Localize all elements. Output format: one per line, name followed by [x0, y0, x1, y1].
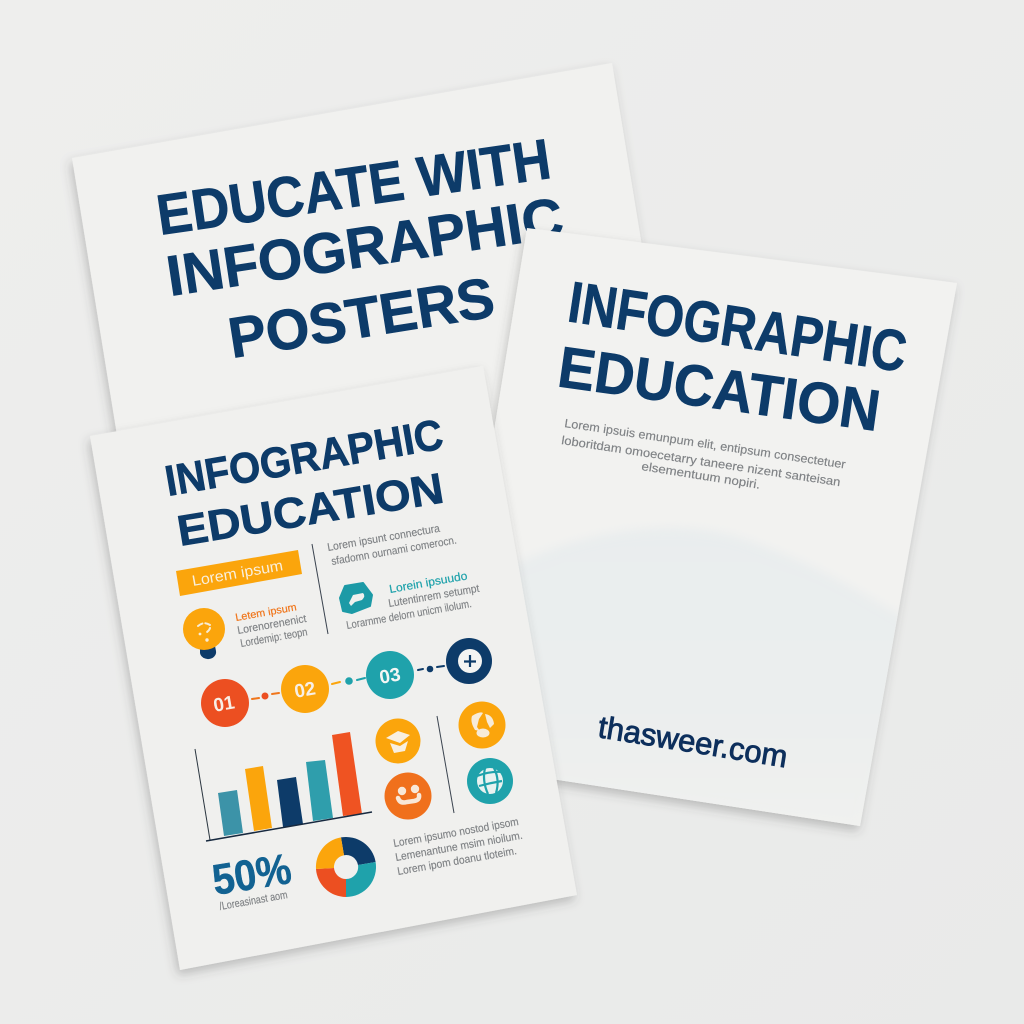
- website url: thasweer.com: [596, 709, 790, 774]
- right card title: [554, 270, 911, 444]
- intro text: sfadomn ournami comerocn.: [330, 535, 458, 568]
- footer text: [392, 816, 524, 878]
- icon: teal chat badge: [340, 583, 372, 613]
- big stat: /Loreasinast aom: [218, 889, 288, 913]
- teal callout: Lorarnme delorn unicm ilolum.: [345, 598, 473, 632]
- right card body text: loboritdam omoecetarry taneere nizent santeisan: [561, 433, 841, 489]
- label banner: Lorem ipsum: [191, 557, 284, 590]
- teal callout: Lutentinrem setumpt: [387, 583, 480, 610]
- right card title: INFOGRAPHIC: [564, 270, 911, 385]
- back card title: POSTERS: [224, 266, 499, 371]
- right card body text: Lorem ipsuis emunpum elit, entipsum consectetuer: [564, 416, 847, 471]
- footer text: Lorem ipsumo nostod ipsom: [392, 816, 520, 850]
- right card body text: [561, 416, 847, 492]
- donut chart: [316, 837, 376, 897]
- icon: graduation cap: [376, 718, 420, 764]
- footer text: Lorem ipom doanu tloteim.: [396, 845, 518, 878]
- right card body text: elsementuum nopiri.: [641, 459, 761, 492]
- teal callout: [345, 570, 480, 632]
- right card lower shade: [521, 535, 840, 593]
- orange callout: [234, 601, 308, 650]
- poster: right card: [440, 228, 957, 830]
- orange callout: Letem ipsum: [234, 601, 298, 624]
- bar chart: [195, 732, 372, 841]
- right card title: EDUCATION: [554, 335, 884, 444]
- step 02: [281, 665, 329, 713]
- icon: world map: [458, 702, 506, 748]
- teal callout: Lorein ipsuudo: [388, 570, 468, 596]
- orange callout: Lordemip: teopn: [239, 626, 308, 650]
- step 03: 03: [378, 664, 402, 689]
- icon: globe: [467, 758, 513, 804]
- front card title: INFOGRAPHIC: [162, 411, 447, 506]
- front card title: EDUCATION: [174, 465, 447, 556]
- intro text: Lorem ipsunt connectura: [326, 523, 442, 554]
- step 03: [366, 651, 414, 699]
- back card title: [153, 127, 567, 371]
- poster: back card: [72, 63, 700, 700]
- step timeline: [201, 638, 492, 727]
- back card title: EDUCATE WITH: [153, 127, 555, 248]
- back card title: INFOGRAPHIC: [162, 186, 567, 309]
- poster: front card: [90, 366, 577, 970]
- footer text: Lemenantune msim nioilum.: [394, 830, 524, 864]
- step plus: [446, 638, 492, 684]
- big stat: 50%: [209, 845, 295, 905]
- step 01: 01: [212, 692, 237, 717]
- orange callout: Lorenorenenict: [236, 613, 307, 637]
- step 01: [201, 679, 249, 727]
- icon: lightbulb: [183, 608, 225, 659]
- step 02: 02: [293, 678, 317, 703]
- label banner: [176, 550, 302, 596]
- front card title: [162, 411, 447, 556]
- icon: people: [384, 772, 432, 820]
